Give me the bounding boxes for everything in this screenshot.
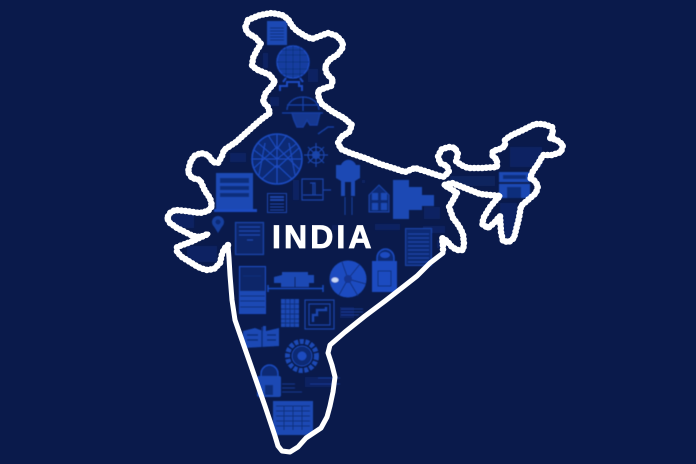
icon: floor plan frame bbox=[305, 300, 334, 329]
icon: open book bbox=[243, 326, 279, 348]
icon: laptop bbox=[214, 173, 257, 212]
icon: document top bbox=[267, 21, 287, 45]
icon: framed screen bbox=[302, 179, 331, 200]
icon: document right bbox=[406, 228, 432, 266]
icon: robot two bbox=[257, 365, 281, 397]
icon: globe on stand bbox=[277, 46, 309, 91]
small data text blocks bbox=[282, 309, 363, 392]
icon: document left bbox=[236, 222, 264, 254]
icon: small document bbox=[268, 194, 286, 212]
icon: dome machine bbox=[282, 97, 334, 134]
icon: ship wheel bbox=[304, 143, 328, 167]
icon: data table bbox=[273, 401, 313, 435]
icon: building chart bbox=[393, 180, 434, 219]
icon: pin bbox=[212, 216, 224, 233]
title: INDIA bbox=[272, 219, 375, 255]
icon: machine on rail bbox=[268, 272, 323, 292]
icon: lock device bbox=[372, 249, 397, 292]
icon: gear bbox=[288, 342, 316, 370]
dim background icons bbox=[172, 53, 542, 387]
icon: disk bbox=[330, 260, 366, 298]
icon collection inside the map bbox=[172, 21, 542, 435]
icon: form document bbox=[240, 266, 266, 314]
icon: robot figure bbox=[336, 160, 360, 215]
icon: keypad bbox=[281, 299, 299, 327]
icon: wire sphere bbox=[252, 134, 302, 184]
icon: cabinet bbox=[369, 185, 389, 212]
icon: northeast panel bbox=[499, 172, 530, 198]
map outline of India bbox=[167, 13, 563, 452]
